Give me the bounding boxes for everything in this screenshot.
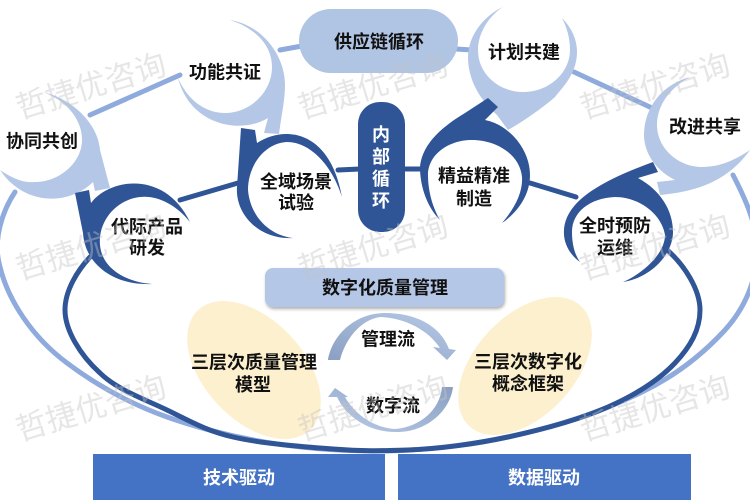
node: all-time preventive maintenance <box>564 162 673 282</box>
watermarks <box>12 47 734 448</box>
label: three-layer digital framework <box>474 351 582 394</box>
bar: data driven: 数据驱动 <box>508 468 580 488</box>
node: all-time preventive maintenance: 运维 <box>597 238 633 258</box>
node: full-domain scenario testing: 全域场景 <box>260 171 332 192</box>
watermarks: 哲捷优咨询 <box>294 369 452 448</box>
watermarks: 哲捷优咨询 <box>576 369 734 448</box>
heading: supply chain loop: 供应链循环 <box>334 31 424 52</box>
arrow: digital flow <box>328 387 453 432</box>
yellow ellipse: three-layer quality model <box>162 276 346 464</box>
label: management flow: 管理流 <box>361 328 415 350</box>
heading: internal loop: 内 <box>372 125 390 145</box>
node: function verification: 功能共证 <box>189 62 261 82</box>
label: three-layer quality model: 模型 <box>235 375 271 395</box>
heading: digital quality management: 数字化质量管理 <box>322 277 448 298</box>
node: collaborative innovation: 协同共创 <box>6 132 78 152</box>
node: lean and precise manufacturing: 精益精准 <box>438 166 510 186</box>
label: digital flow: 数字流 <box>366 395 420 416</box>
node: lean and precise manufacturing: 制造 <box>456 189 492 209</box>
watermarks: 哲捷优咨询 <box>12 47 170 126</box>
node: shared improvement: 改进共享 <box>669 116 741 137</box>
node: function verification <box>178 20 285 134</box>
watermarks: 哲捷优咨询 <box>576 47 734 126</box>
heading: internal loop: 环 <box>372 191 390 211</box>
inner internal loop <box>65 169 700 451</box>
node: next generation product R&D: 研发 <box>129 237 165 258</box>
node: next generation product R&D <box>75 183 190 284</box>
node: collaborative innovation <box>0 92 110 199</box>
watermarks: 哲捷优咨询 <box>12 208 170 287</box>
heading: digital quality management <box>265 268 504 307</box>
watermarks: 哲捷优咨询 <box>576 208 734 287</box>
bar: data driven <box>398 454 691 500</box>
bar: technology driven: 技术驱动 <box>203 468 275 488</box>
watermarks: 哲捷优咨询 <box>294 208 452 287</box>
label: three-layer quality model: 三层次质量管理 <box>191 352 317 372</box>
label: three-layer digital framework: 三层次数字化 <box>474 351 582 372</box>
watermarks: 哲捷优咨询 <box>294 47 452 126</box>
node: joint planning: 计划共建 <box>488 42 560 62</box>
heading: internal loop: 循 <box>372 169 390 189</box>
heading: supply chain loop <box>299 9 458 73</box>
label: three-layer quality model <box>191 352 317 395</box>
heading: internal loop <box>358 102 405 232</box>
label: three-layer digital framework: 概念框架 <box>492 373 564 394</box>
bar: technology driven <box>93 454 385 500</box>
node: all-time preventive maintenance: 全时预防 <box>579 215 651 236</box>
arrow: management flow <box>328 313 456 360</box>
node: full-domain scenario testing <box>237 128 342 238</box>
heading: internal loop: 部 <box>372 146 390 167</box>
node: full-domain scenario testing: 试验 <box>278 192 314 213</box>
node: joint planning <box>468 7 577 130</box>
node: shared improvement <box>644 77 750 195</box>
watermarks: 哲捷优咨询 <box>12 369 170 448</box>
yellow ellipse: three-layer digital framework <box>433 272 617 460</box>
node: lean and precise manufacturing <box>420 98 530 223</box>
node: next generation product R&D: 代际产品 <box>111 217 183 237</box>
